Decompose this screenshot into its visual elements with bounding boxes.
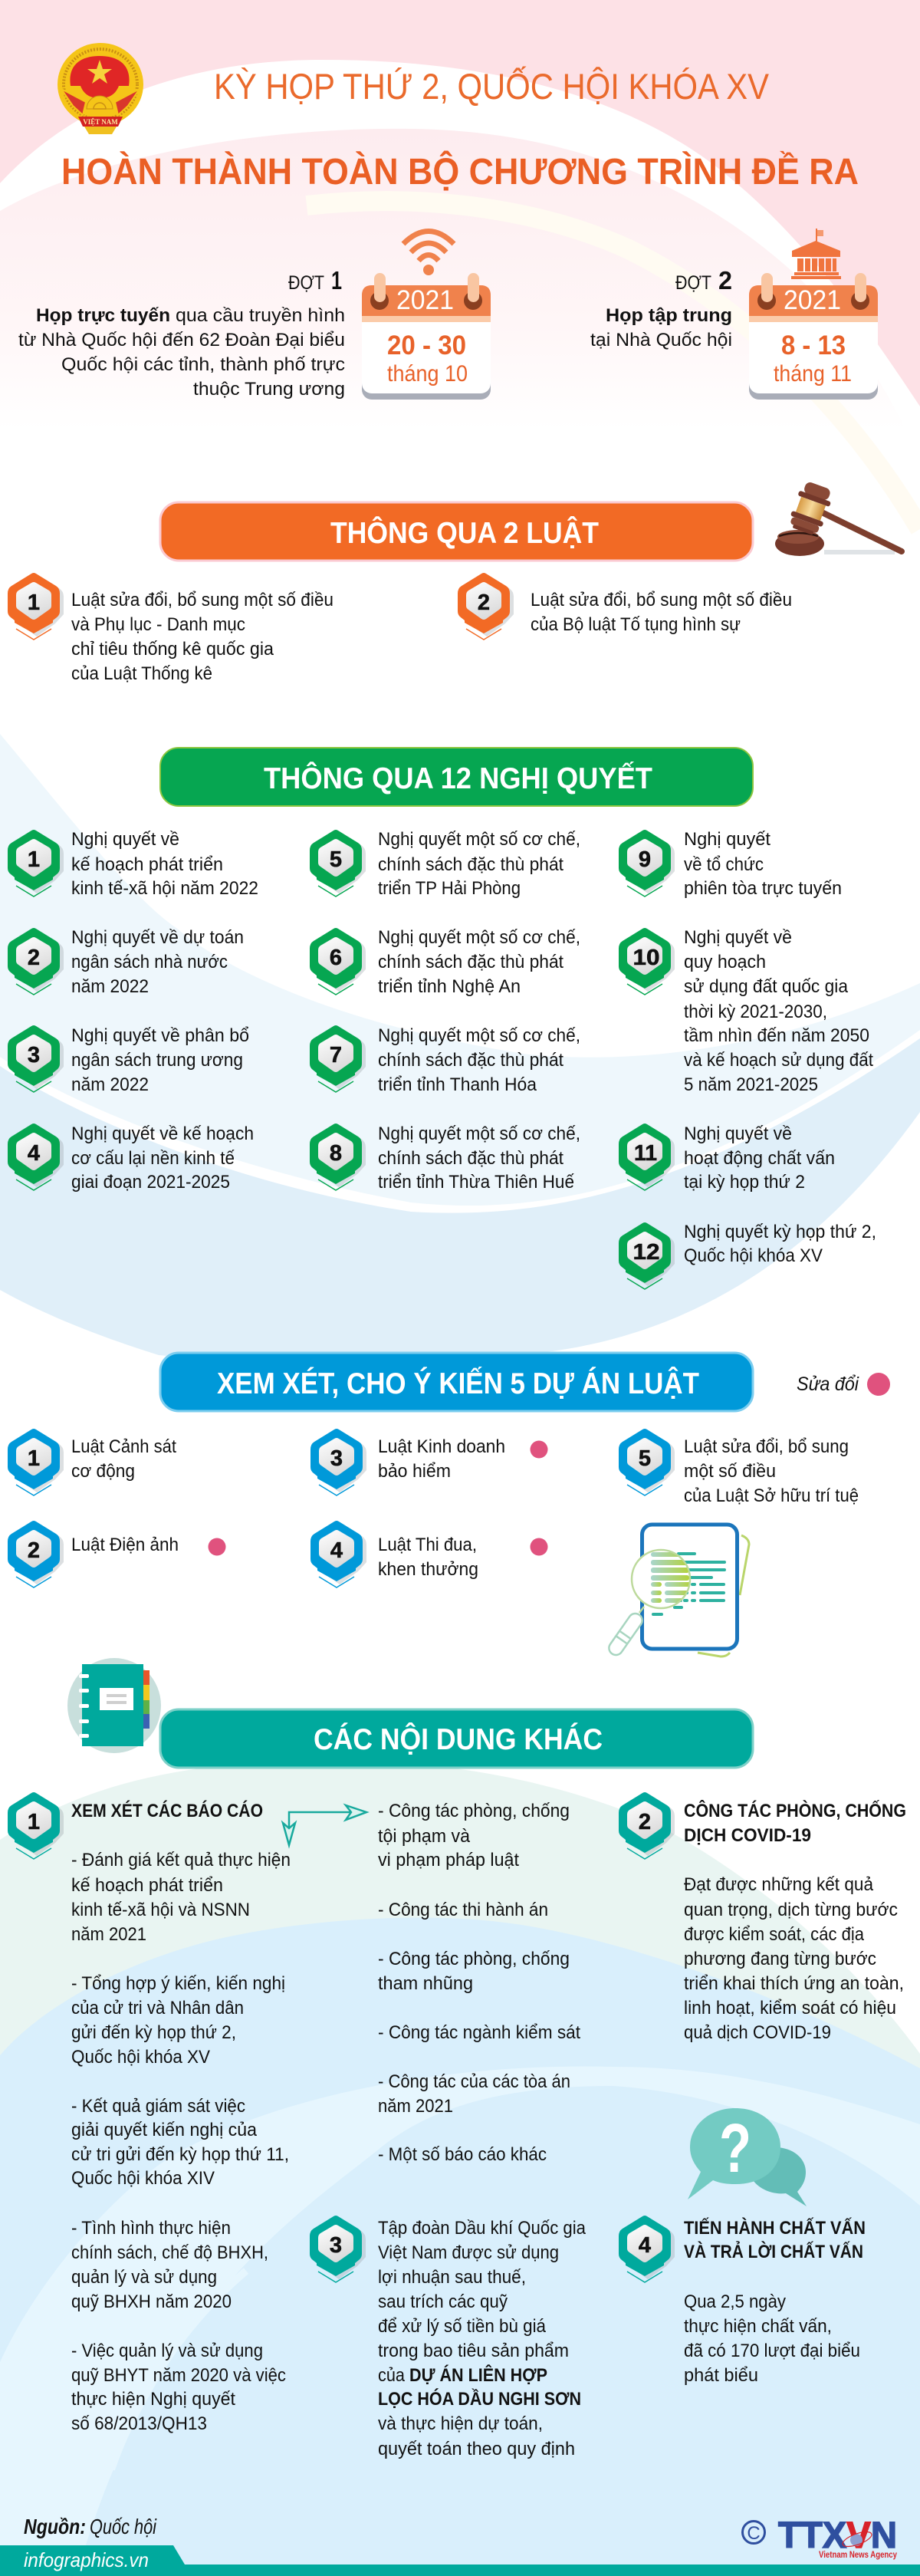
item: bill 2: 2 xyxy=(28,1538,40,1563)
icon: document with magnifier xyxy=(606,1525,749,1658)
text: reports list middle xyxy=(378,1801,580,2165)
item: bill 2: Luật Điện ảnh xyxy=(71,1535,179,1555)
item: Nghi Son refinery: Tập đoàn Dầu khí Quốc gia xyxy=(378,2218,586,2239)
text: reports list middle: - Công tác phòng, chống xyxy=(378,1801,570,1821)
item: resolution 6: Nghị quyết một số cơ chế, xyxy=(378,927,580,948)
text: session 1 xyxy=(18,266,345,400)
footer: website tab: infographics.vn xyxy=(24,2548,149,2571)
text: reports list left: quỹ BHXH năm 2020 xyxy=(71,2291,232,2312)
item: questioning: TIẾN HÀNH CHẤT VẤN xyxy=(684,2217,866,2239)
item: bill 3: 3 xyxy=(330,1446,343,1471)
item: resolution 5: triển TP Hải Phòng xyxy=(378,878,521,899)
text: reports list middle: - Công tác ngành kiểm sát xyxy=(378,2022,580,2043)
item: law 2: 2 xyxy=(478,591,490,615)
item: resolution 2 xyxy=(8,927,244,997)
text: reports list middle: - Công tác thi hành án xyxy=(378,1900,548,1920)
item: resolution 8: Nghị quyết một số cơ chế, xyxy=(378,1124,580,1144)
item: bill 4 xyxy=(310,1521,547,1587)
item: resolution 4: cơ cấu lại nền kinh tế xyxy=(71,1148,235,1169)
item: resolution 10: 5 năm 2021-2025 xyxy=(684,1074,818,1095)
item: resolution 5: Nghị quyết một số cơ chế, xyxy=(378,829,580,850)
text: reports list left: - Tình hình thực hiện xyxy=(71,2218,231,2239)
logo: TTXVN: TTXVN xyxy=(778,2515,897,2556)
item: resolution 3: ngân sách trung ương xyxy=(71,1050,243,1071)
item: resolution 11: 11 xyxy=(634,1141,657,1166)
legend: amended marker xyxy=(797,1373,890,1396)
item: resolution 9 xyxy=(619,829,842,899)
text: reports list middle: - Một số báo cáo khác xyxy=(378,2144,547,2165)
title xyxy=(61,66,859,192)
logo: TTXVN: C xyxy=(747,2523,761,2544)
text: reports list left: kinh tế-xã hội và NSNN xyxy=(71,1900,250,1920)
item: questioning: thực hiện chất vấn, xyxy=(684,2316,832,2337)
item: resolution 10: Nghị quyết về xyxy=(684,927,792,948)
item: resolution 11: Nghị quyết về xyxy=(684,1124,792,1144)
item: resolution 10: và kế hoạch sử dụng đất xyxy=(684,1050,873,1071)
text: session 2 xyxy=(590,266,732,350)
icon: question speech bubbles: ? xyxy=(719,2110,751,2187)
arrows: to report lists xyxy=(283,1805,366,1845)
item: covid-19: Đạt được những kết quả xyxy=(684,1874,873,1895)
item: questioning: VÀ TRẢ LỜI CHẤT VẤN xyxy=(684,2240,863,2262)
icon: calendar 2: 8 - 13 xyxy=(781,331,846,360)
text: reports list left: kế hoạch phát triển xyxy=(71,1875,223,1896)
item: resolution 9: phiên tòa trực tuyến xyxy=(684,878,842,899)
item: bill 4: khen thưởng xyxy=(378,1559,478,1580)
icon: wifi xyxy=(403,232,454,275)
banner: Xem xét, cho ý kiến 5 dự án luật xyxy=(160,1353,753,1411)
item: resolution 10: tầm nhìn đến năm 2050 xyxy=(684,1025,869,1046)
item: resolution 7 xyxy=(310,1025,580,1095)
text: reports list middle: tham nhũng xyxy=(378,1973,473,1994)
item: resolution 10 xyxy=(619,927,873,1095)
item: resolution 1: kế hoạch phát triển xyxy=(71,854,223,875)
item: resolution 8: 8 xyxy=(330,1141,342,1166)
item: Nghi Son refinery: Việt Nam được sử dụng xyxy=(378,2242,559,2263)
text: reports list left: số 68/2013/QH13 xyxy=(71,2413,207,2434)
item: Nghi Son refinery: sau trích các quỹ xyxy=(378,2291,508,2312)
item: questioning xyxy=(619,2216,866,2386)
item: covid-19: phương đang từng bước xyxy=(684,1949,876,1969)
item: bill 5: Luật sửa đổi, bổ sung xyxy=(684,1436,849,1457)
logo: TTXVN: Vietnam News Agency xyxy=(819,2549,897,2560)
text: reports list left: của cử tri và Nhân dân xyxy=(71,1998,244,2018)
item: covid-19: được kiểm soát, các địa xyxy=(684,1924,864,1945)
item: resolution 12: 12 xyxy=(633,1240,659,1265)
text: session 1: từ Nhà Quốc hội đến 62 Đoàn Đại biểu xyxy=(18,330,345,350)
banner: Thông qua 2 luật xyxy=(160,502,753,561)
item: Nghi Son refinery: trong bao tiêu sản phẩm xyxy=(378,2341,569,2361)
item: Nghi Son refinery: và thực hiện dự toán, xyxy=(378,2413,543,2434)
item: resolution 1: kinh tế-xã hội năm 2022 xyxy=(71,878,258,899)
text: reports list left: cử tri gửi đến kỳ họp thứ 11, xyxy=(71,2144,289,2165)
item: resolution 9: về tổ chức xyxy=(684,854,764,875)
source: Quốc hội xyxy=(90,2515,157,2538)
text: reports list left: giải quyết kiến nghị của xyxy=(71,2120,257,2140)
text: session 1: 1 xyxy=(331,266,342,294)
item: resolution 8: triển tỉnh Thừa Thiên Huế xyxy=(378,1172,574,1193)
legend: amended marker: Sửa đổi xyxy=(797,1374,859,1395)
item: bill 5 xyxy=(619,1429,859,1506)
text: reports list left: quản lý và sử dụng xyxy=(71,2267,217,2288)
item: resolution 11 xyxy=(619,1124,835,1193)
item: resolution 4 xyxy=(8,1124,254,1193)
item: Nghi Son refinery: quyết toán theo quy định xyxy=(378,2439,575,2459)
text: reports list left: chính sách, chế độ BHXH, xyxy=(71,2242,268,2263)
item: resolution 10: 10 xyxy=(633,946,659,970)
banner: Các nội dung khác xyxy=(160,1709,753,1768)
item: bill 5: của Luật Sở hữu trí tuệ xyxy=(684,1485,859,1506)
footer: website tab xyxy=(0,2545,920,2576)
item: resolution 6: chính sách đặc thù phát xyxy=(378,952,564,972)
item: resolution 8 xyxy=(310,1124,580,1193)
item: resolution 9: 9 xyxy=(639,847,651,872)
icon: gavel xyxy=(775,479,902,556)
text: reports list left: - Đánh giá kết quả thực hiện xyxy=(71,1850,291,1870)
text: session 1: Họp trực tuyến xyxy=(36,305,170,326)
item: covid-19: quả dịch COVID-19 xyxy=(684,2022,831,2043)
text: reports list middle: - Công tác phòng, chống xyxy=(378,1949,570,1969)
item: law 2: Luật sửa đổi, bổ sung một số điều xyxy=(531,590,792,610)
text: reports list middle: năm 2021 xyxy=(378,2096,453,2117)
icon: calendar 2: tháng 11 xyxy=(774,361,852,387)
text: session 2: ĐỢT xyxy=(675,272,711,294)
item: reports heading xyxy=(8,1792,263,1859)
text: session 2: tại Nhà Quốc hội xyxy=(590,330,732,350)
item: resolution 3 xyxy=(8,1025,249,1095)
item: resolution 2: ngân sách nhà nước xyxy=(71,952,228,972)
item: resolution 2: 2 xyxy=(28,946,40,970)
item: covid-19: linh hoạt, kiểm soát có hiệu xyxy=(684,1998,896,2018)
item: bill 1 xyxy=(8,1429,176,1495)
item: covid-19 xyxy=(619,1792,906,2043)
banner: Thông qua 2 luật: THÔNG QUA 2 LUẬT xyxy=(330,515,599,550)
item: resolution 1 xyxy=(8,829,258,899)
banner: Thông qua 12 nghị quyết: THÔNG QUA 12 NGHỊ QUYẾT xyxy=(264,761,652,795)
text: reports list left: năm 2021 xyxy=(71,1924,146,1945)
item: resolution 6 xyxy=(310,927,580,997)
item: bill 4: 4 xyxy=(330,1538,343,1563)
item: resolution 4: 4 xyxy=(28,1141,40,1166)
item: resolution 1: 1 xyxy=(28,847,40,872)
banner: Xem xét, cho ý kiến 5 dự án luật: XEM XÉT, CHO Ý KIẾN 5 DỰ ÁN LUẬT xyxy=(217,1367,699,1400)
item: bill 1: 1 xyxy=(28,1446,40,1471)
item: bill 3: Luật Kinh doanh xyxy=(378,1436,505,1457)
item: bill 4: Luật Thi đua, xyxy=(378,1535,477,1555)
item: questioning: 4 xyxy=(639,2233,651,2258)
item: bill 1: cơ động xyxy=(71,1461,135,1482)
item: covid-19: DỊCH COVID-19 xyxy=(684,1825,811,1846)
item: bill 2 xyxy=(8,1521,225,1587)
item: resolution 7: 7 xyxy=(330,1043,342,1068)
item: resolution 3: năm 2022 xyxy=(71,1074,149,1095)
item: resolution 3: Nghị quyết về phân bổ xyxy=(71,1025,249,1046)
item: Nghi Son refinery: DỰ ÁN LIÊN HỢP xyxy=(409,2364,547,2386)
text: reports list left: - Việc quản lý và sử dụng xyxy=(71,2341,263,2361)
icon: parliament building xyxy=(791,229,841,279)
item: law 1: Luật sửa đổi, bổ sung một số điều xyxy=(71,590,334,610)
text: reports list left: - Kết quả giám sát việc xyxy=(71,2096,245,2117)
item: covid-19: triển khai thích ứng an toàn, xyxy=(684,1973,904,1994)
text: session 1: qua cầu truyền hình xyxy=(176,305,345,326)
text: session 1: ĐỢT xyxy=(288,272,324,294)
text: reports list left xyxy=(71,1850,291,2434)
item: covid-19: 2 xyxy=(639,1810,651,1834)
item: resolution 8: chính sách đặc thù phát xyxy=(378,1148,564,1169)
item: resolution 12 xyxy=(619,1222,876,1289)
item: resolution 5: chính sách đặc thù phát xyxy=(378,854,564,875)
source xyxy=(24,2515,157,2538)
item: law 1: của Luật Thống kê xyxy=(71,663,212,684)
item: resolution 6: triển tỉnh Nghệ An xyxy=(378,976,521,997)
text: reports list left: gửi đến kỳ họp thứ 2, xyxy=(71,2022,236,2043)
item: law 1: và Phụ lục - Danh mục xyxy=(71,614,245,635)
text: session 1: thuộc Trung ương xyxy=(193,379,345,400)
item: questioning: Qua 2,5 ngày xyxy=(684,2291,787,2312)
item: bill 5: 5 xyxy=(639,1446,651,1471)
item: Nghi Son refinery xyxy=(310,2216,586,2459)
text: session 2: Họp tập trung xyxy=(606,305,732,326)
item: resolution 4: giai đoạn 2021-2025 xyxy=(71,1172,230,1193)
text: reports list middle: tội phạm và xyxy=(378,1826,470,1847)
icon: calendar 1: 2021 xyxy=(396,285,454,315)
item: bill 3 xyxy=(310,1429,547,1495)
text: reports list middle: - Công tác của các tòa án xyxy=(378,2071,570,2092)
item: resolution 10: quy hoạch xyxy=(684,952,766,972)
item: resolution 11: hoạt động chất vấn xyxy=(684,1148,835,1169)
banner: Các nội dung khác: CÁC NỘI DUNG KHÁC xyxy=(314,1722,603,1756)
item: law 1: chỉ tiêu thống kê quốc gia xyxy=(71,639,274,660)
icon: notebook xyxy=(67,1658,161,1753)
item: reports heading: 1 xyxy=(28,1810,40,1834)
icon: calendar 2: 2021 xyxy=(784,285,841,315)
item: resolution 2: Nghị quyết về dự toán xyxy=(71,927,244,948)
title: HOÀN THÀNH TOÀN BỘ CHƯƠNG TRÌNH ĐỀ RA xyxy=(61,150,859,192)
item: resolution 5: 5 xyxy=(330,847,342,872)
icon: calendar 2 xyxy=(749,273,878,400)
item: resolution 11: tại kỳ họp thứ 2 xyxy=(684,1172,805,1193)
icon: national emblem: VIỆT NAM xyxy=(83,118,118,126)
item: questioning: phát biểu xyxy=(684,2365,758,2386)
text: reports list left: Quốc hội khóa XIV xyxy=(71,2168,215,2189)
item: resolution 6: 6 xyxy=(330,946,342,970)
item: bill 5: một số điều xyxy=(684,1461,776,1482)
item: resolution 10: thời kỳ 2021-2030, xyxy=(684,1002,827,1022)
item: law 1: 1 xyxy=(28,591,40,615)
item: Nghi Son refinery: để xử lý số tiền bù giá xyxy=(378,2316,546,2337)
text: session 2: 2 xyxy=(718,266,732,294)
item: resolution 12: Nghị quyết kỳ họp thứ 2, xyxy=(684,1222,876,1242)
title: KỲ HỌP THỨ 2, QUỐC HỘI KHÓA XV xyxy=(214,66,770,107)
item: resolution 7: Nghị quyết một số cơ chế, xyxy=(378,1025,580,1046)
item: bill 3: bảo hiểm xyxy=(378,1461,451,1482)
item: reports heading: XEM XÉT CÁC BÁO CÁO xyxy=(71,1800,263,1821)
source: Nguồn: xyxy=(24,2515,86,2538)
item: resolution 2: năm 2022 xyxy=(71,976,149,997)
text: session 1: Quốc hội các tỉnh, thành phố trực xyxy=(61,354,345,375)
item: questioning: đã có 170 lượt đại biểu xyxy=(684,2341,860,2361)
item: resolution 10: sử dụng đất quốc gia xyxy=(684,976,848,997)
item: resolution 5 xyxy=(310,829,580,899)
item: law 2: của Bộ luật Tố tụng hình sự xyxy=(531,614,741,635)
item: covid-19: quan trọng, dịch từng bước xyxy=(684,1900,898,1920)
item: law 2 xyxy=(458,573,792,640)
icon: calendar 1 xyxy=(362,273,491,400)
icon: calendar 1: tháng 10 xyxy=(387,361,468,387)
item: resolution 7: chính sách đặc thù phát xyxy=(378,1050,564,1071)
item: bill 1: Luật Cảnh sát xyxy=(71,1436,176,1457)
item: resolution 1: Nghị quyết về xyxy=(71,829,179,850)
item: Nghi Son refinery: LỌC HÓA DẦU NGHI SƠN xyxy=(378,2388,581,2410)
text: reports list middle: vi phạm pháp luật xyxy=(378,1850,519,1870)
item: Nghi Son refinery: lợi nhuận sau thuế, xyxy=(378,2267,526,2288)
text: reports list left: Quốc hội khóa XV xyxy=(71,2047,211,2068)
item: resolution 12: Quốc hội khóa XV xyxy=(684,1245,823,1266)
text: reports list left: quỹ BHYT năm 2020 và việc xyxy=(71,2365,286,2386)
icon: national emblem xyxy=(58,43,143,134)
icon: calendar 1: 20 - 30 xyxy=(387,331,466,360)
text: reports list left: thực hiện Nghị quyết xyxy=(71,2389,235,2410)
item: Nghi Son refinery: 3 xyxy=(330,2233,342,2258)
item: Nghi Son refinery: của xyxy=(378,2365,405,2386)
item: resolution 7: triển tỉnh Thanh Hóa xyxy=(378,1074,537,1095)
item: law 1 xyxy=(8,573,334,684)
item: resolution 3: 3 xyxy=(28,1043,40,1068)
item: resolution 9: Nghị quyết xyxy=(684,829,770,850)
item: resolution 4: Nghị quyết về kế hoạch xyxy=(71,1124,254,1144)
text: reports list left: - Tổng hợp ý kiến, kiến nghị xyxy=(71,1973,285,1994)
banner: Thông qua 12 nghị quyết xyxy=(160,748,753,806)
icon: question speech bubbles xyxy=(688,2108,807,2206)
